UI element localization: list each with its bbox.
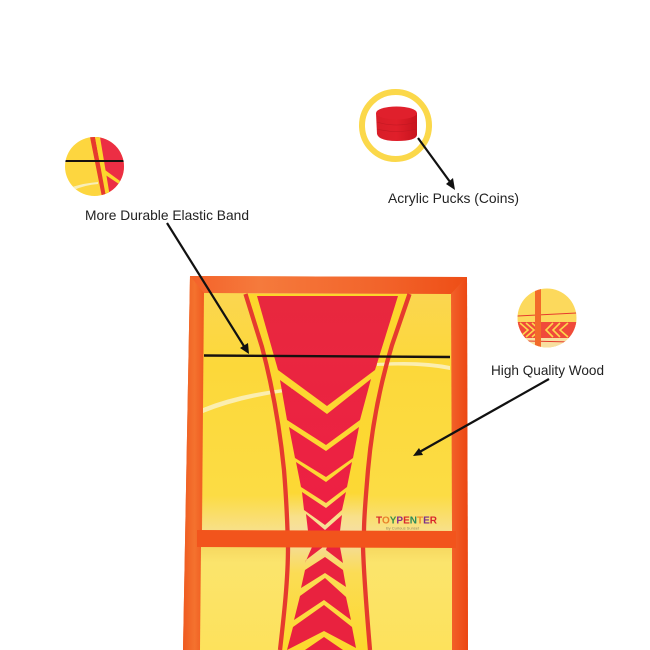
board frame — [183, 276, 468, 650]
elastic band — [204, 356, 450, 357]
red side stripes — [246, 294, 410, 531]
upper playfield — [202, 293, 452, 531]
brand logo: By Curious Sunset — [386, 526, 420, 530]
callout icon: acrylic pucks — [362, 92, 429, 159]
lower playfield — [200, 547, 452, 650]
arrow: high quality wood — [413, 379, 549, 456]
arrow: acrylic pucks — [418, 138, 455, 190]
label: elastic band: More Durable Elastic Band — [85, 207, 249, 223]
crossbar — [197, 530, 456, 548]
label: high quality wood: High Quality Wood — [491, 362, 604, 378]
callout icon: elastic band close-up — [65, 137, 125, 197]
arrow: elastic band — [167, 223, 249, 354]
red chevron panels — [257, 296, 398, 531]
callout icon: wood board close-up — [517, 288, 577, 348]
game board — [183, 276, 468, 650]
yellow centre lane — [246, 294, 410, 531]
brand logo: TOYPENTER — [376, 516, 438, 526]
label: acrylic pucks: Acrylic Pucks (Coins) — [388, 190, 519, 206]
